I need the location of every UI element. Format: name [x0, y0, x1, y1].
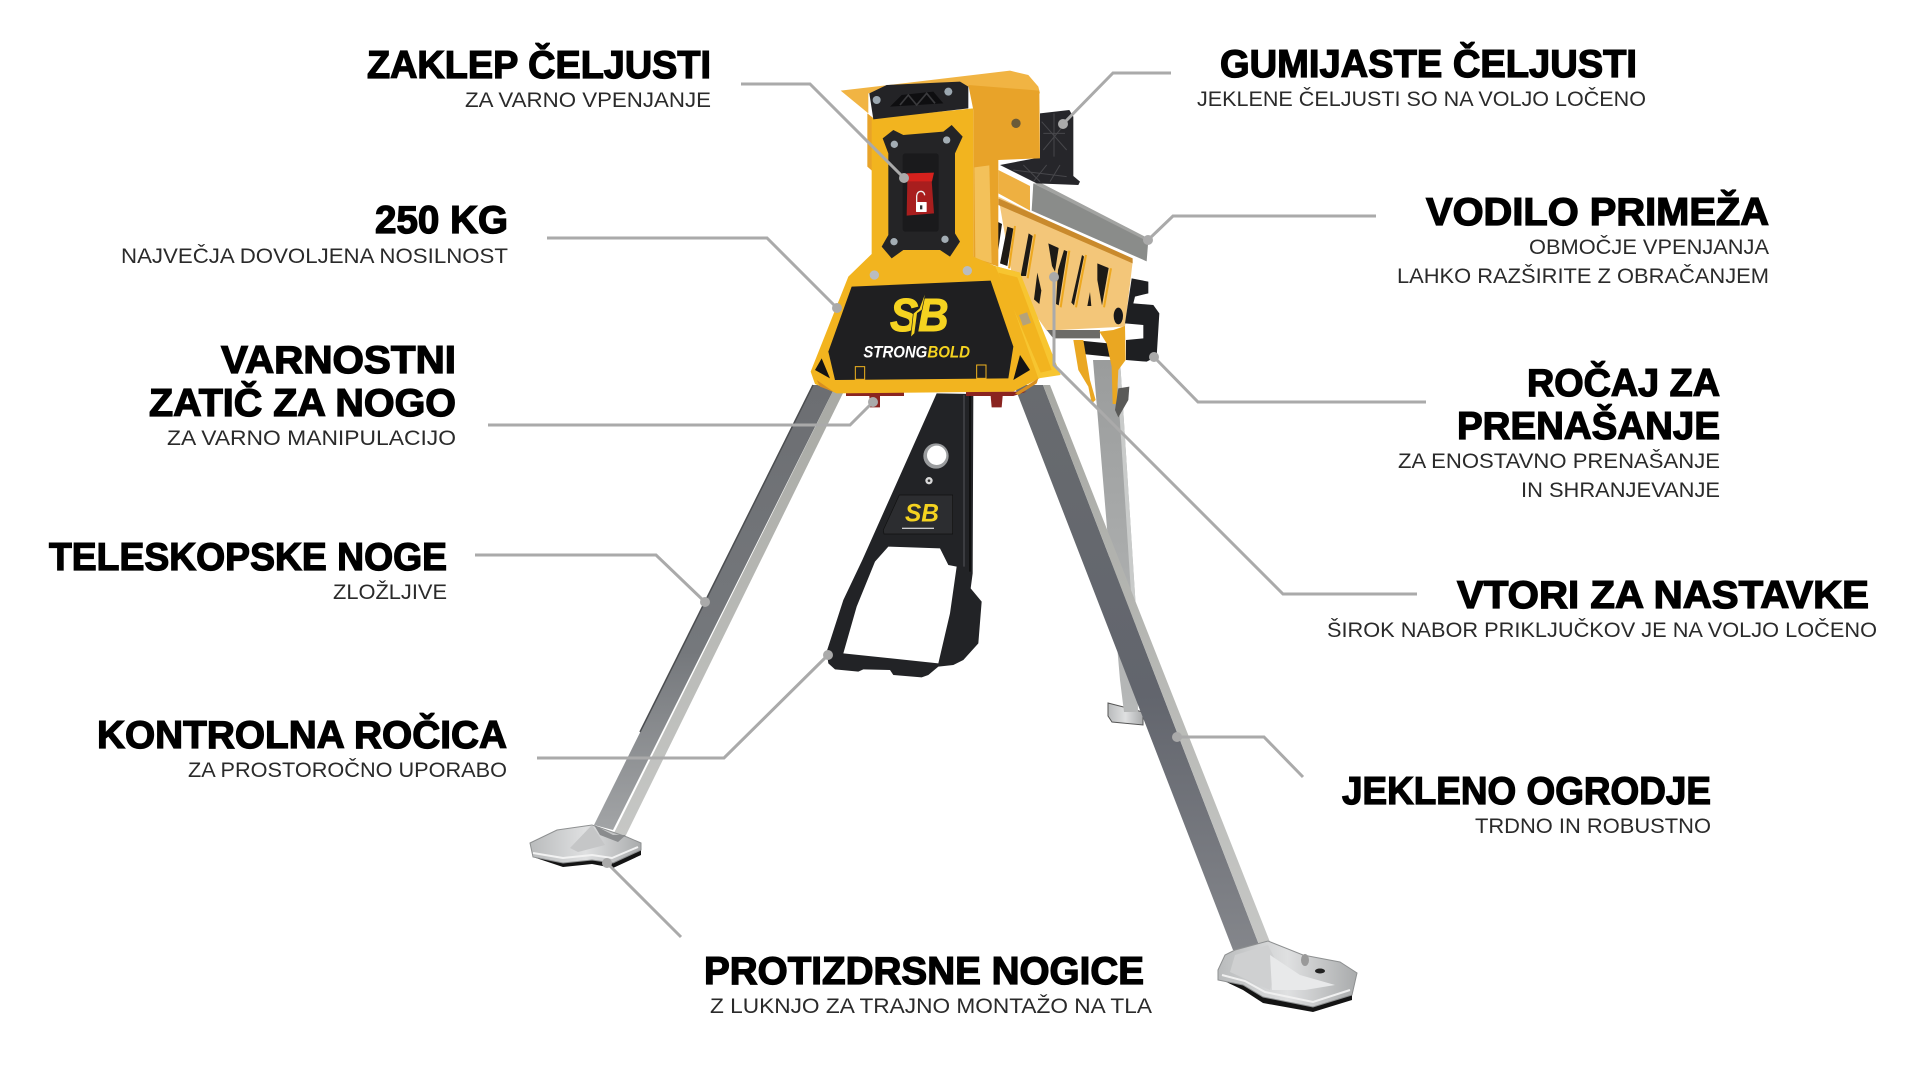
heading: PROTIZDRSNE NOGICE: [704, 950, 1144, 993]
tan upper piece: [998, 170, 1030, 211]
callout: kontrolna ročica: [97, 650, 833, 782]
rail guide: [1032, 183, 1148, 261]
control handle kickstand: [827, 393, 982, 677]
callout: teleskopske noge: [49, 536, 710, 607]
rear yellow beam: [998, 197, 1133, 331]
heading: VTORI ZA NASTAVKE: [1457, 574, 1869, 617]
callout: vodilo primeža: [1143, 190, 1770, 288]
leader line: [602, 858, 681, 937]
subtitle: ZA VARNO VPENJANJE: [465, 88, 711, 112]
safety pins: [846, 392, 1027, 407]
handle: [1047, 278, 1159, 417]
lock plate: [882, 125, 963, 258]
rail guide and beam: [997, 110, 1159, 417]
base screws: [870, 270, 879, 280]
leader line: [1149, 352, 1426, 402]
leader line: [1049, 272, 1417, 594]
upper jaw pad: [869, 82, 968, 119]
subtitle: NAJVEČJA DOVOLJENA NOSILNOST: [121, 243, 508, 268]
column side: [968, 85, 1040, 267]
heading line 2: PRENAŠANJE: [1457, 403, 1720, 448]
subtitle line 2: IN SHRANJEVANJE: [1521, 478, 1720, 502]
heading: ZAKLEP ČELJUSTI: [367, 42, 711, 87]
leader line: [488, 397, 878, 425]
leader line: [1143, 216, 1376, 245]
small logo: SB: [905, 500, 939, 527]
black rubber jaw: [1000, 110, 1080, 185]
subtitle: TRDNO IN ROBUSTNO: [1475, 814, 1711, 838]
left foot: [530, 825, 641, 868]
callout: gumijaste čeljusti: [1058, 41, 1646, 129]
left front leg: [594, 385, 847, 835]
subtitle: ŠIROK NABOR PRIKLJUČKOV JE NA VOLJO LOČENO: [1327, 617, 1877, 642]
callout: jekleno ogrodje: [1172, 732, 1711, 838]
slots: [997, 222, 1109, 306]
label plate: [828, 281, 1013, 380]
subtitle: ZLOŽLJIVE: [333, 579, 447, 604]
brand name: STRONG: [863, 343, 927, 362]
leader line: [1058, 73, 1171, 129]
rear leg: [1093, 360, 1143, 725]
product: workbench: [530, 71, 1357, 1012]
subtitle: JEKLENE ČELJUSTI SO NA VOLJO LOČENO: [1197, 86, 1646, 111]
heading: 250 KG: [375, 199, 508, 242]
top flange: [841, 71, 1040, 113]
right foot: [1218, 941, 1357, 1012]
subtitle line 1: OBMOČJE VPENJANJA: [1529, 234, 1770, 259]
leader line: [537, 650, 833, 758]
leader line: [1172, 732, 1303, 777]
subtitle line 2: LAHKO RAZŠIRITE Z OBRAČANJEM: [1397, 263, 1769, 288]
heading line 2: ZATIČ ZA NOGO: [149, 380, 456, 425]
callout: zaklep čeljusti: [367, 42, 909, 183]
subtitle: ZA PROSTOROČNO UPORABO: [188, 757, 507, 782]
heading: TELESKOPSKE NOGE: [49, 536, 447, 579]
slot highlight edges: [1009, 226, 1111, 307]
callout: ročaj za prenašanje: [1149, 352, 1720, 502]
leader line: [475, 555, 710, 607]
right front leg: [1014, 385, 1270, 950]
brand name: [863, 343, 970, 362]
heading: JEKLENO OGRODJE: [1342, 770, 1711, 813]
heading line 1: ROČAJ ZA: [1527, 360, 1720, 405]
brand name: BOLD: [927, 343, 970, 362]
logo mark: SB: [890, 289, 949, 341]
subtitle line 1: ZA ENOSTAVNO PRENAŠANJE: [1398, 448, 1720, 473]
heading: KONTROLNA ROČICA: [97, 712, 507, 757]
callout: varnostni zatič: [149, 339, 878, 450]
callout: protizdrsne nogice: [602, 858, 1153, 1018]
heading: GUMIJASTE ČELJUSTI: [1220, 41, 1637, 86]
red lock switch: [907, 173, 934, 216]
callout: 250 kg: [121, 199, 842, 313]
subtitle: ZA VARNO MANIPULACIJO: [167, 426, 456, 450]
front body: [811, 71, 1061, 407]
column front and base: [811, 108, 1039, 393]
heading line 1: VARNOSTNI: [221, 339, 456, 382]
leader line: [547, 238, 842, 313]
subtitle: Z LUKNJO ZA TRAJNO MONTAŽO NA TLA: [710, 993, 1153, 1018]
heading: VODILO PRIMEŽA: [1426, 190, 1769, 234]
callout: vtori za nastavke: [1049, 272, 1877, 642]
leader line: [741, 84, 909, 183]
